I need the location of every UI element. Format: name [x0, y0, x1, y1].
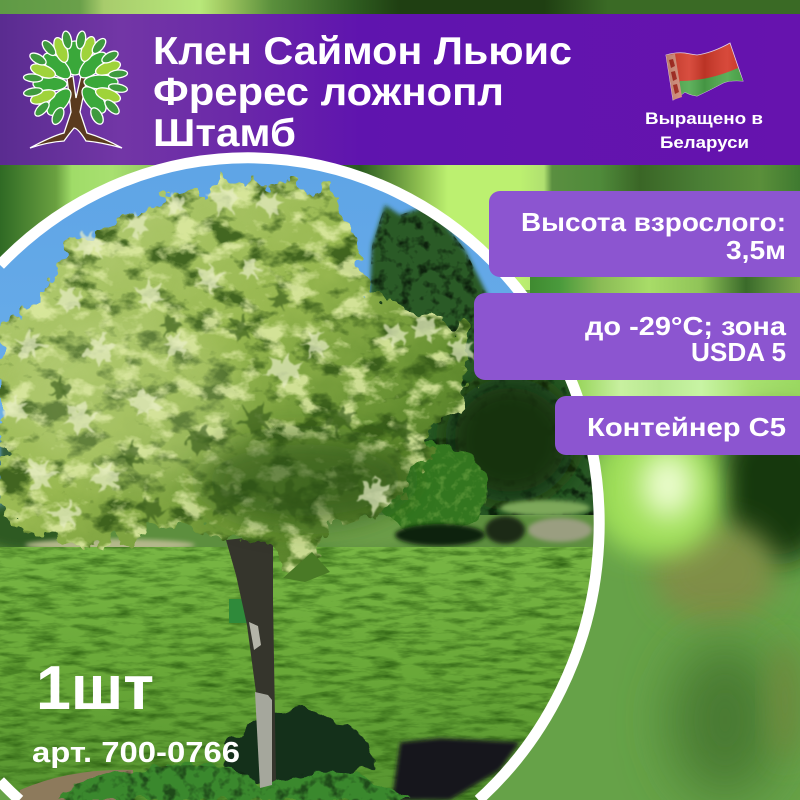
hedge and shrubs [0, 444, 610, 551]
card: height: Высота взрослого: [521, 207, 786, 237]
logo: tree [23, 30, 128, 148]
shade and mulch [20, 706, 520, 800]
article number: арт. 700-0766 [32, 737, 240, 769]
title: Штамб [153, 112, 296, 155]
left distant trees [0, 436, 12, 498]
header band [0, 14, 800, 165]
photo: maple tree in round frame [0, 150, 610, 800]
trunk [226, 535, 276, 788]
background conifers [364, 202, 594, 515]
card: hardiness: до -29°C; зона [585, 311, 787, 341]
lawn [0, 547, 610, 800]
tag on trunk [229, 599, 248, 623]
title: Клен Саймон Льюис [153, 30, 572, 73]
flag caption [645, 109, 763, 152]
canopy: dark leaves and gaps [46, 284, 421, 533]
card: hardiness: USDA 5 [691, 337, 786, 367]
sky [0, 163, 514, 511]
card: hardiness [474, 293, 800, 380]
foreground plants [58, 765, 412, 800]
card: height: 3,5м [726, 235, 786, 265]
card: height [489, 191, 800, 277]
flag caption: Выращено в [645, 109, 763, 128]
quantity: 1шт [36, 654, 154, 723]
leafy canopy [0, 170, 481, 582]
title: Фререс ложнопл [153, 71, 504, 114]
title [153, 30, 572, 155]
canopy: pale leaves [0, 176, 481, 536]
flag caption: Беларуси [660, 133, 749, 152]
card: container: Контейнер С5 [587, 412, 786, 442]
flag of Belarus [666, 43, 743, 100]
white ring [0, 158, 599, 800]
card: container [555, 396, 800, 455]
logo roots and trunk [30, 76, 122, 148]
